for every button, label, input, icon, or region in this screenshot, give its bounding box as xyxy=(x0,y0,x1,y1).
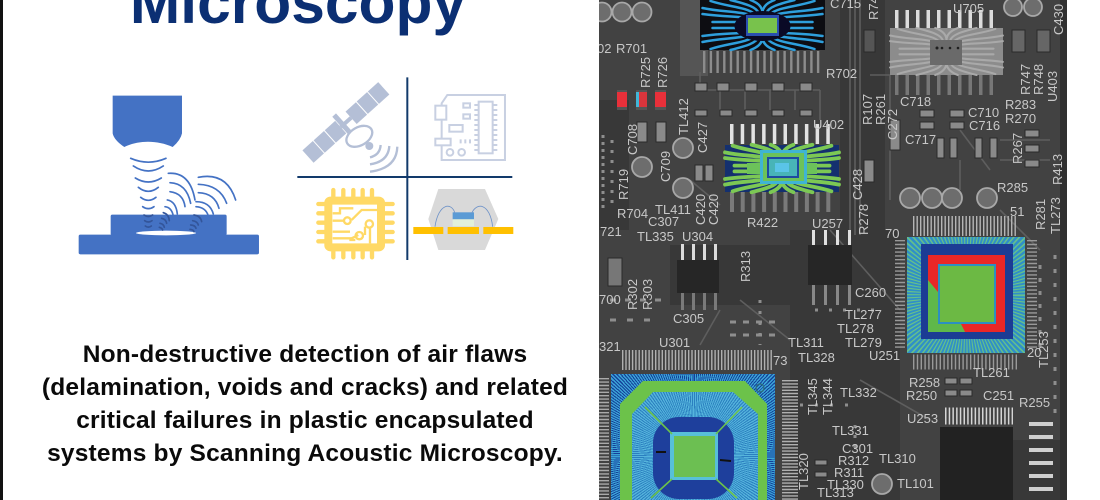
chip: acoustic scan top xyxy=(700,0,825,50)
silkscreen labels: R302 xyxy=(625,279,640,310)
silkscreen labels: TL273 xyxy=(1048,197,1063,234)
silkscreen labels: R258 xyxy=(909,375,940,390)
vias and ring pads xyxy=(592,0,1042,494)
sound waves xyxy=(131,158,236,216)
silkscreen labels: R270 xyxy=(1005,111,1036,126)
silkscreen labels: C718 xyxy=(900,94,931,109)
description text: Non-destructive detection of air flaws xyxy=(83,341,527,368)
silkscreen labels: C709 xyxy=(658,151,673,182)
silkscreen labels: C301 xyxy=(842,441,873,456)
silkscreen labels: C428 xyxy=(850,169,865,200)
small passive components xyxy=(608,30,1050,477)
silkscreen labels: U304 xyxy=(682,229,713,244)
chip: large bottom scan xyxy=(611,374,775,500)
board traces xyxy=(690,0,1050,420)
silkscreen labels: C272 xyxy=(885,109,900,140)
silkscreen labels: C305 xyxy=(673,311,704,326)
silkscreen labels: TL345 xyxy=(805,378,820,415)
description text: (delamination, voids and cracks) and related xyxy=(42,374,568,401)
silkscreen labels: U403 xyxy=(1045,71,1060,102)
description text: critical failures in plastic encapsulated xyxy=(76,407,534,434)
silkscreen labels: C430 xyxy=(1051,4,1066,35)
application quadrants xyxy=(297,77,513,260)
silkscreen labels: C708 xyxy=(625,124,640,155)
silkscreen labels: R278 xyxy=(856,204,871,235)
silkscreen labels: TL261 xyxy=(973,365,1010,380)
silkscreen labels: R107 xyxy=(860,94,875,125)
silkscreen labels: 70 xyxy=(885,226,899,241)
silkscreen labels: 51 xyxy=(1010,204,1024,219)
silkscreen labels: R313 xyxy=(738,251,753,282)
silkscreen labels: R281 xyxy=(1033,199,1048,230)
silkscreen labels: 02 xyxy=(597,41,611,56)
silkscreen labels: C717 xyxy=(905,132,936,147)
silkscreen labels: R250 xyxy=(906,388,937,403)
description text xyxy=(42,341,568,467)
silkscreen labels: C427 xyxy=(695,122,710,153)
silkscreen labels: R261 xyxy=(873,94,888,125)
icon: satellite xyxy=(299,78,397,172)
silkscreen labels: TL278 xyxy=(837,321,874,336)
transducer head xyxy=(113,96,182,147)
silkscreen labels: C716 xyxy=(969,118,1000,133)
icon: circuit board xyxy=(435,95,505,160)
silkscreen labels: R303 xyxy=(640,279,655,310)
chip: green acoustic scan xyxy=(725,145,839,192)
air flaw void xyxy=(136,231,196,235)
silkscreen labels: R255 xyxy=(1019,395,1050,410)
silkscreen labels: TL277 xyxy=(845,307,882,322)
silkscreen labels: TL412 xyxy=(676,98,691,135)
silkscreen labels: U257 xyxy=(812,216,843,231)
icon: encapsulated package cross-section xyxy=(413,189,513,250)
silkscreen labels: C260 xyxy=(855,285,886,300)
silkscreen labels: TL310 xyxy=(879,451,916,466)
silkscreen labels: R719 xyxy=(616,169,631,200)
silkscreen labels: TL320 xyxy=(796,453,811,490)
waves inside sample xyxy=(144,213,202,232)
dark IC packages xyxy=(677,245,1013,500)
silkscreen labels: 700 xyxy=(599,292,621,307)
silkscreen labels: R701 xyxy=(616,41,647,56)
icon: microchip xyxy=(318,190,393,257)
silkscreen labels: TL101 xyxy=(897,476,934,491)
silkscreen labels: U402 xyxy=(813,117,844,132)
silkscreen labels: R312 xyxy=(838,453,869,468)
silkscreen labels: R702 xyxy=(826,66,857,81)
silkscreen labels: TL335 xyxy=(637,229,674,244)
silkscreen labels xyxy=(597,0,1066,500)
silkscreen labels: R704 xyxy=(617,206,648,221)
panel: circuit board acoustic scan image xyxy=(592,0,1067,500)
silkscreen labels: TL313 xyxy=(817,485,854,500)
silkscreen labels: C307 xyxy=(648,214,679,229)
chip leads xyxy=(604,19,1041,500)
silkscreen labels: C251 xyxy=(983,388,1014,403)
silkscreen labels: R726 xyxy=(655,57,670,88)
silkscreen labels: R311 xyxy=(834,465,864,480)
silkscreen labels: R422 xyxy=(747,215,778,230)
description text: systems by Scanning Acoustic Microscopy. xyxy=(47,440,563,467)
silkscreen labels: TL279 xyxy=(845,335,882,350)
silkscreen labels: U251 xyxy=(869,348,900,363)
silkscreen labels: C420 xyxy=(693,194,708,225)
silkscreen labels: 73 xyxy=(773,353,787,368)
chip: grey acoustic scan xyxy=(890,28,1003,75)
silkscreen labels: U253 xyxy=(907,411,938,426)
silkscreen labels: TL344 xyxy=(820,378,835,415)
solder pad speckle xyxy=(603,135,1055,455)
silkscreen labels: C710 xyxy=(968,105,999,120)
silkscreen labels: U705 xyxy=(953,1,984,16)
silkscreen labels: TL253 xyxy=(1036,331,1051,368)
chip: right scan with red delamination xyxy=(906,235,1026,355)
left edge bar xyxy=(0,0,3,500)
silkscreen labels: TL328 xyxy=(798,350,835,365)
quadrant divider lines xyxy=(297,77,512,260)
silkscreen labels: TL331 xyxy=(832,423,869,438)
silkscreen labels: TL332 xyxy=(840,385,877,400)
silkscreen labels: R413 xyxy=(1050,154,1065,185)
silkscreen labels: R283 xyxy=(1005,97,1036,112)
silkscreen labels: TL311 xyxy=(788,335,824,350)
silkscreen labels: R725 xyxy=(638,57,653,88)
icon: acoustic transducer over sample xyxy=(79,96,259,254)
sample base xyxy=(79,215,259,254)
silkscreen labels: TL411 xyxy=(655,202,691,217)
red flagged resistors xyxy=(617,90,666,110)
silkscreen labels: 20 xyxy=(1027,345,1041,360)
silkscreen labels: U301 xyxy=(659,335,690,350)
silkscreen labels: R267 xyxy=(1010,133,1025,164)
silkscreen labels: R747 xyxy=(1018,64,1033,95)
silkscreen labels: 721 xyxy=(600,224,622,239)
board tone regions xyxy=(599,0,1067,500)
silkscreen labels: R748 xyxy=(1031,64,1046,95)
silkscreen labels: TL330 xyxy=(827,477,864,492)
silkscreen labels: R285 xyxy=(997,180,1028,195)
silkscreen labels: 321 xyxy=(599,339,621,354)
silkscreen labels: C420 xyxy=(706,194,721,225)
